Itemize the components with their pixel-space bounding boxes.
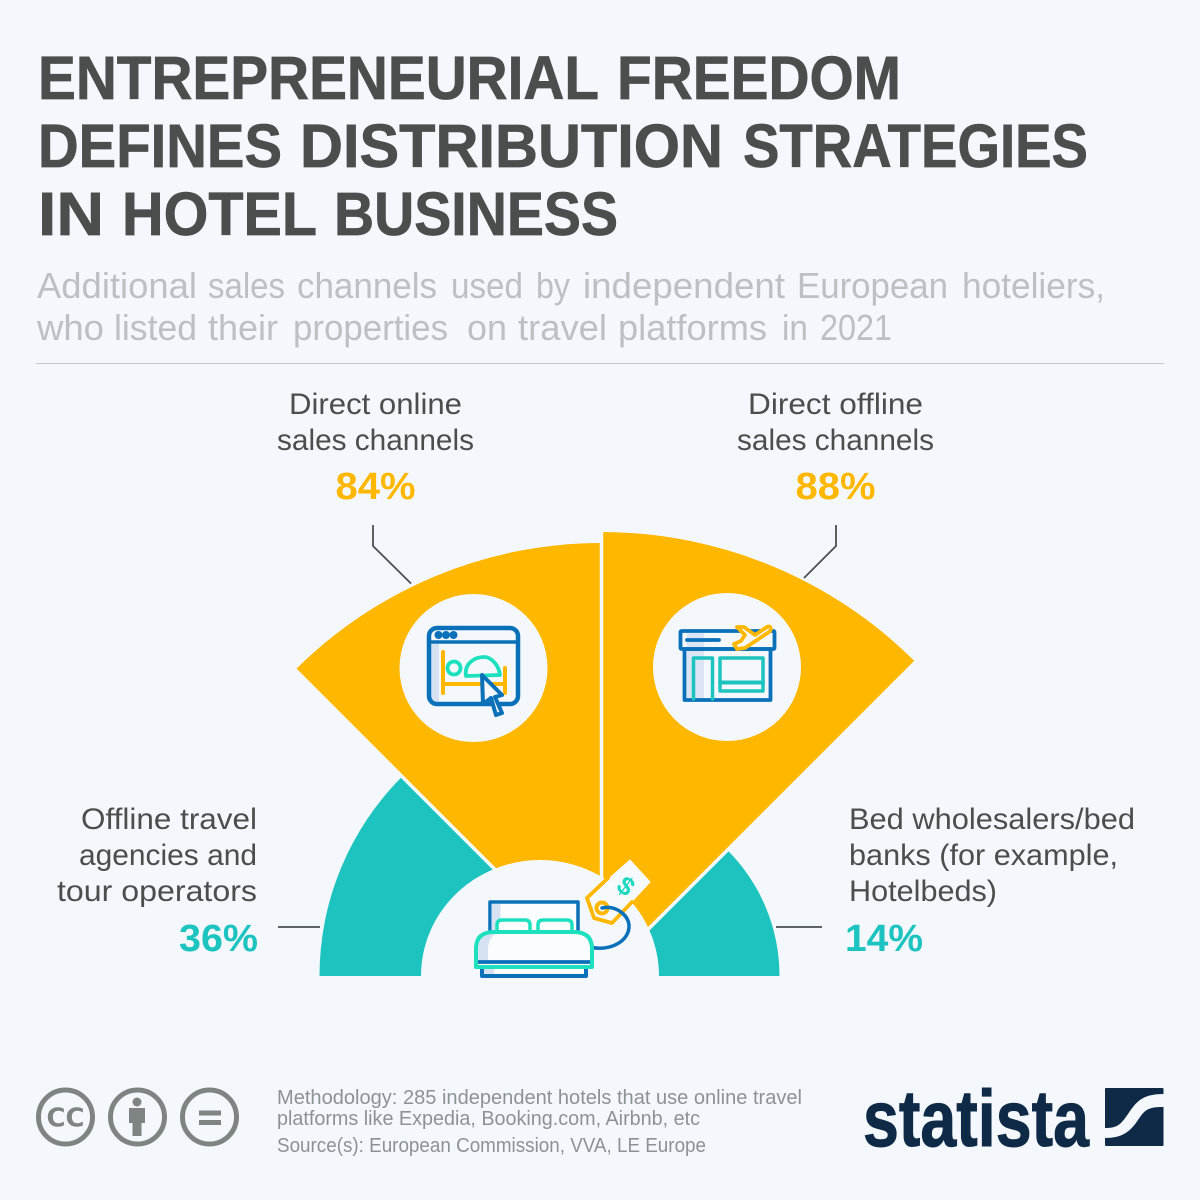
subtitle: travel (518, 307, 607, 348)
icon: creative commons licence: CC (46, 1104, 84, 1134)
subtitle: properties (293, 307, 448, 348)
label: direct offline: 88% (796, 466, 876, 508)
subtitle: on (467, 307, 507, 348)
fan chart (285, 528, 925, 990)
price tag: $ (611, 870, 641, 903)
title: IN (38, 180, 104, 248)
title: DEFINES (38, 112, 282, 180)
statista logo: statista (863, 1074, 1089, 1163)
label: offline travel agencies: Offline travel (81, 803, 257, 836)
label: bed wholesalers: Hotelbeds) (849, 875, 997, 908)
label: offline travel agencies: 36% (179, 918, 258, 960)
subtitle: Additional (37, 265, 197, 306)
label: direct offline: sales channels (737, 424, 934, 457)
label: direct online (277, 388, 474, 508)
wedge: offline travel agencies 36% (320, 777, 602, 976)
subtitle: by (536, 265, 570, 306)
icon: creative commons licence (38, 1090, 236, 1144)
label: direct online: 84% (336, 466, 416, 508)
subtitle: channels (297, 265, 437, 306)
wedge: direct online 84% (295, 543, 602, 976)
methodology and source (277, 1087, 802, 1157)
methodology and source: platforms like Expedia, Booking.com, Airbnb, etc (277, 1108, 700, 1130)
title: BUSINESS (334, 180, 618, 248)
subtitle: independent (583, 265, 785, 306)
label: bed wholesalers: banks (for example, (849, 839, 1118, 872)
title: DISTRIBUTION (300, 112, 723, 180)
icon: bed with price tag (476, 860, 650, 976)
subtitle: their (208, 307, 278, 348)
centre semicircle (421, 860, 659, 990)
price tag (587, 860, 650, 923)
title: STRATEGIES (743, 112, 1088, 180)
title (38, 44, 1088, 248)
subtitle: platforms (618, 307, 767, 348)
subtitle: listed (114, 307, 197, 348)
title: ENTREPRENEURIAL (38, 44, 598, 112)
label: offline travel agencies: tour operators (57, 875, 257, 908)
label: offline travel agencies (57, 803, 258, 960)
subtitle: hoteliers, (962, 265, 1105, 306)
title: HOTEL (122, 180, 316, 248)
subtitle: who (36, 307, 104, 348)
icon: online booking window (400, 594, 548, 742)
subtitle: used (451, 265, 523, 306)
label: bed wholesalers: Bed wholesalers/bed (849, 803, 1135, 836)
label: direct offline (737, 388, 934, 508)
subtitle: European (797, 265, 948, 306)
label: bed wholesalers: 14% (845, 918, 923, 960)
label: bed wholesalers (845, 803, 1135, 960)
label: direct offline: Direct offline (748, 388, 923, 421)
leader lines (278, 525, 836, 927)
label: direct online: sales channels (277, 424, 474, 457)
title: FREEDOM (617, 44, 901, 112)
wedge: direct offline 88% (602, 532, 916, 976)
subtitle: sales (208, 265, 285, 306)
icon: travel agency storefront (653, 593, 801, 741)
methodology and source: Source(s): European Commission, VVA, LE Europe (277, 1135, 706, 1157)
subtitle: in (782, 307, 808, 348)
subtitle (36, 265, 1105, 348)
wedge: bed wholesalers 14% (602, 850, 780, 976)
label: offline travel agencies: agencies and (79, 839, 257, 872)
subtitle: 2021 (820, 307, 892, 348)
methodology and source: Methodology: 285 independent hotels that use online travel (277, 1087, 802, 1109)
label: direct online: Direct online (289, 388, 462, 421)
